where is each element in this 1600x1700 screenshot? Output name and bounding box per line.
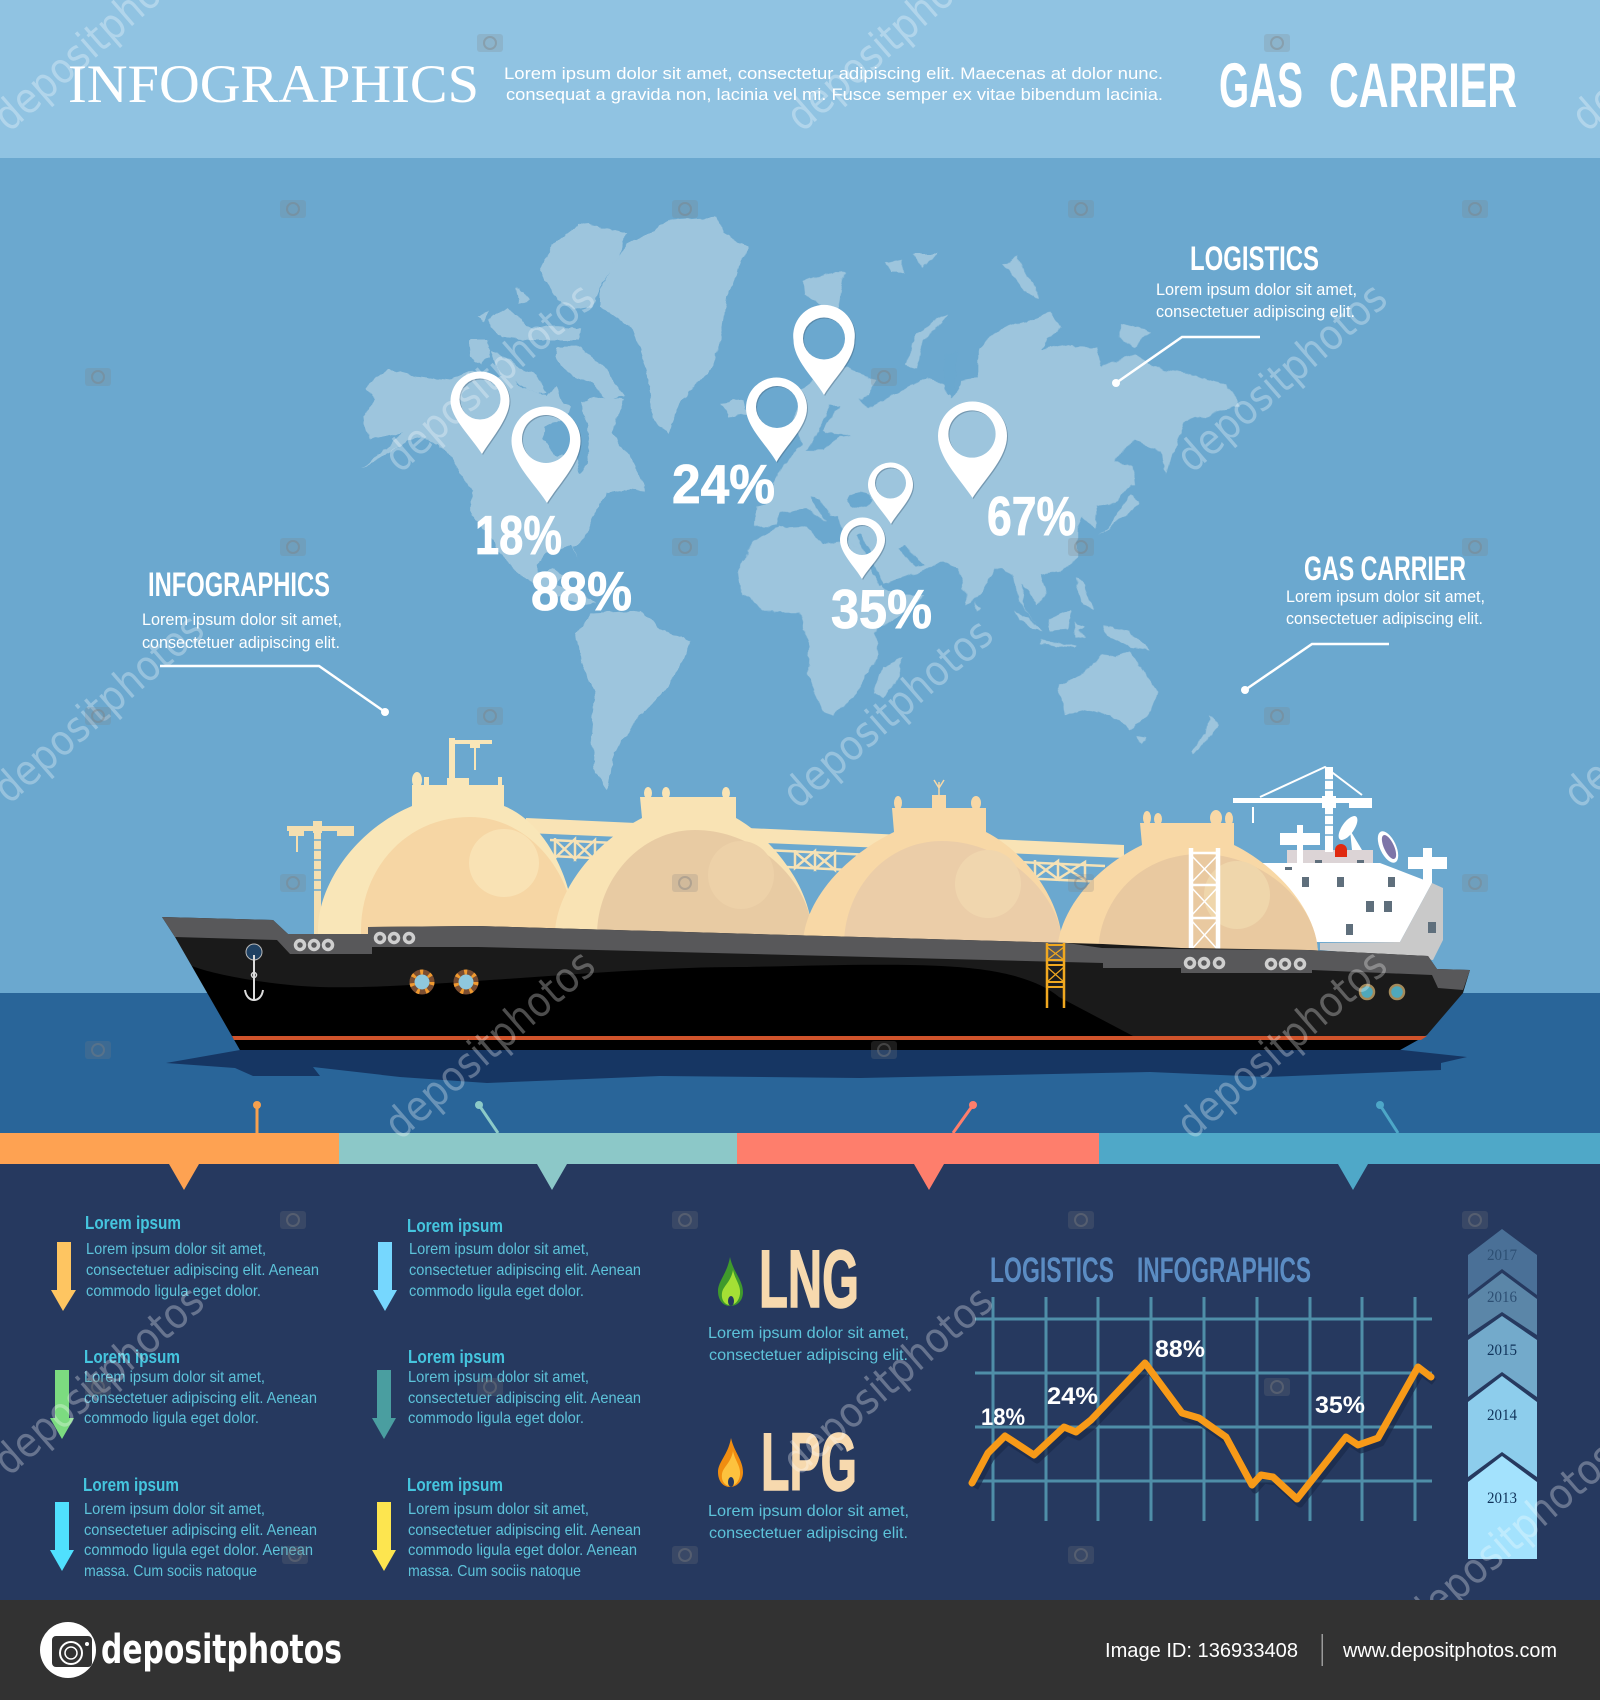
colored ribbon with pointers	[0, 1133, 1600, 1190]
list item 5	[50, 1474, 317, 1580]
marker red	[953, 1101, 977, 1133]
tank 1	[318, 785, 574, 960]
list item 1	[51, 1212, 319, 1311]
tank 2	[555, 787, 812, 960]
callout: gas carrier: GAS CARRIER	[1304, 550, 1466, 588]
callout: infographics: consectetuer adipiscing elit.	[142, 634, 340, 652]
header description	[504, 65, 1163, 104]
LNG label: LNG	[759, 1234, 859, 1325]
year 2014	[1468, 1376, 1537, 1477]
chart value 35: 35%	[1315, 1392, 1365, 1419]
ribbon orange	[0, 1133, 339, 1190]
88 percent: 88%	[531, 560, 632, 622]
percentage labels on map	[475, 453, 1076, 640]
list item 4: consectetuer adipiscing elit. Aenean	[408, 1390, 641, 1407]
year 2015: 2015	[1487, 1342, 1517, 1359]
list item 2: consectetuer adipiscing elit. Aenean	[409, 1262, 641, 1279]
white ladder	[1191, 848, 1218, 956]
footer	[0, 1600, 1600, 1700]
tank crane	[412, 738, 502, 788]
watermark: depositphotos	[1166, 940, 1396, 1149]
footer logo	[40, 1622, 342, 1678]
pin 2	[512, 406, 580, 503]
header brand title	[1219, 51, 1517, 121]
list item 3: Lorem ipsum dolor sit amet,	[84, 1369, 265, 1386]
list item 4: Lorem ipsum	[408, 1346, 505, 1367]
deck band	[162, 917, 1470, 990]
chart heading: INFOGRAPHICS	[1137, 1251, 1311, 1290]
line chart	[972, 1297, 1434, 1521]
map: inland seas	[806, 352, 958, 586]
radar dishes	[1335, 813, 1402, 866]
callout: logistics: LOGISTICS	[1190, 240, 1319, 278]
red waterline	[232, 1036, 1427, 1040]
67 percent: 67%	[987, 485, 1076, 547]
catwalk beam and trusses	[526, 818, 1124, 882]
red beacon	[1335, 844, 1347, 857]
tank 4	[1057, 810, 1318, 970]
list item 2: Lorem ipsum	[407, 1215, 503, 1236]
orange ladder	[1047, 943, 1064, 1008]
18 percent: 18%	[475, 504, 562, 566]
LNG block	[708, 1234, 909, 1364]
bridge crosses	[1280, 825, 1447, 883]
LPG text: consectetuer adipiscing elit.	[709, 1525, 908, 1542]
sky background	[0, 158, 1600, 993]
year 2013	[1468, 1456, 1537, 1559]
superstructure	[1233, 767, 1447, 960]
ribbon blue	[1099, 1133, 1600, 1190]
list item 3	[50, 1346, 317, 1439]
icon: anchor	[245, 944, 263, 1000]
sea	[0, 993, 1600, 1133]
marker teal	[475, 1101, 498, 1133]
ribbon teal	[339, 1133, 737, 1190]
LNG text: Lorem ipsum dolor sit amet,	[708, 1325, 909, 1342]
callout: infographics: INFOGRAPHICS	[148, 566, 330, 604]
map: eurasia africa and australia	[737, 254, 1240, 753]
chart heading: LOGISTICS	[990, 1251, 1114, 1290]
watermark camera icons	[85, 34, 1488, 1564]
list item 2: commodo ligula eget dolor.	[409, 1283, 584, 1300]
list item 4: commodo ligula eget dolor.	[408, 1410, 584, 1427]
location pins	[450, 305, 1007, 579]
map: north america and greenland	[360, 217, 747, 605]
chart value 88: 88%	[1155, 1336, 1205, 1363]
LNG text	[708, 1325, 909, 1364]
header brand title: GAS	[1219, 51, 1303, 121]
watermark: depositphotos	[772, 1276, 1002, 1485]
year chevron stack	[1468, 1229, 1537, 1559]
tank 3	[803, 780, 1062, 960]
pin 4	[793, 305, 855, 395]
callout: logistics: consectetuer adipiscing elit.	[1156, 303, 1355, 321]
list item 6: Lorem ipsum	[407, 1474, 503, 1495]
LPG block	[708, 1417, 909, 1542]
orange data line	[972, 1363, 1431, 1499]
gas carrier ship	[162, 738, 1470, 1050]
marker orange	[253, 1101, 261, 1133]
callout: gas carrier: Lorem ipsum dolor sit amet,	[1286, 588, 1485, 606]
ribbon red	[737, 1133, 1099, 1190]
pin 7	[840, 518, 885, 579]
list item 5: consectetuer adipiscing elit. Aenean	[84, 1522, 317, 1539]
pin 6	[868, 462, 913, 524]
list item 1: commodo ligula eget dolor.	[86, 1283, 261, 1300]
header title: INFOGRAPHICS	[68, 54, 479, 114]
line shadow	[975, 1368, 1434, 1504]
icon: orange flame	[718, 1438, 743, 1487]
ship shadow on water	[166, 1050, 1467, 1083]
bow hull windows	[412, 972, 476, 992]
callout: infographics	[142, 566, 389, 716]
marker blue	[1376, 1101, 1398, 1133]
footer logo: depositphotos	[101, 1627, 342, 1673]
chart value 24: 24%	[1047, 1383, 1098, 1410]
list item 3: commodo ligula eget dolor.	[84, 1410, 259, 1427]
24 percent: 24%	[672, 453, 775, 515]
year 2013: 2013	[1487, 1490, 1517, 1507]
callout: gas carrier: consectetuer adipiscing elit.	[1286, 610, 1483, 628]
watermark: depositphotos	[374, 940, 604, 1149]
image id: Image ID: 136933408	[1105, 1640, 1298, 1662]
pin 5	[938, 402, 1007, 498]
year 2017: 2017	[1487, 1247, 1517, 1264]
map: south america	[577, 610, 690, 789]
watermark: depositphotos	[772, 609, 1002, 818]
header band	[0, 0, 1600, 158]
list item 5: massa. Cum sociis natoque	[84, 1563, 257, 1580]
year 2017	[1468, 1229, 1537, 1295]
year 2014: 2014	[1487, 1407, 1517, 1424]
list item 4: Lorem ipsum dolor sit amet,	[408, 1369, 589, 1386]
year 2016	[1468, 1273, 1537, 1335]
main crane	[1233, 767, 1372, 852]
list item 6: consectetuer adipiscing elit. Aenean	[408, 1522, 641, 1539]
hull	[162, 917, 1470, 1050]
year 2015	[1468, 1316, 1537, 1397]
list item 4	[372, 1346, 641, 1439]
callout: infographics: Lorem ipsum dolor sit amet,	[142, 611, 342, 629]
pin 1	[450, 372, 510, 454]
windows	[1285, 860, 1436, 935]
list item 1: consectetuer adipiscing elit. Aenean	[86, 1262, 319, 1279]
list item 6	[372, 1474, 641, 1580]
list item 6: Lorem ipsum dolor sit amet,	[408, 1501, 589, 1518]
icon: green flame	[718, 1257, 743, 1306]
list item 1: Lorem ipsum dolor sit amet,	[86, 1241, 266, 1258]
chart value 18: 18%	[981, 1404, 1025, 1431]
list item 6: massa. Cum sociis natoque	[408, 1563, 581, 1580]
list item 5: commodo ligula eget dolor. Aenean	[84, 1542, 313, 1559]
chart heading	[990, 1251, 1311, 1290]
pin 3	[746, 377, 807, 462]
navy lower panel	[0, 1164, 1600, 1600]
stern hull windows	[1360, 985, 1404, 999]
list item 2: Lorem ipsum dolor sit amet,	[409, 1241, 589, 1258]
LPG label: LPG	[761, 1417, 857, 1508]
website: www.depositphotos.com	[1342, 1640, 1557, 1662]
bow crane	[287, 821, 354, 934]
year 2016: 2016	[1487, 1289, 1517, 1306]
35 percent: 35%	[831, 578, 932, 640]
watermark: depositphotos	[374, 273, 604, 482]
LPG text: Lorem ipsum dolor sit amet,	[708, 1503, 909, 1520]
deck portholes	[296, 934, 1304, 968]
callout: logistics	[1112, 240, 1357, 387]
world map	[360, 217, 1240, 789]
list item 5: Lorem ipsum	[83, 1474, 179, 1495]
sea markers	[253, 1101, 1398, 1133]
list item 6: commodo ligula eget dolor. Aenean	[408, 1542, 637, 1559]
callout: logistics: Lorem ipsum dolor sit amet,	[1156, 281, 1357, 299]
list item 1: Lorem ipsum	[85, 1212, 181, 1233]
list item 3: consectetuer adipiscing elit. Aenean	[84, 1390, 317, 1407]
header description: Lorem ipsum dolor sit amet, consectetur adipiscing elit. Maecenas at dolor nunc.	[504, 65, 1163, 83]
hull black lower section	[192, 965, 1425, 1050]
callout: gas carrier	[1241, 550, 1485, 694]
LNG text: consectetuer adipiscing elit.	[709, 1347, 908, 1364]
list item 5: Lorem ipsum dolor sit amet,	[84, 1501, 265, 1518]
watermark: depositphotos	[1166, 273, 1396, 482]
header description: consequat a gravida non, lacinia vel mi. Fusce semper ex vitae bibendum lacinia.	[506, 86, 1163, 104]
list item 3: Lorem ipsum	[84, 1346, 180, 1367]
list item 2	[373, 1215, 641, 1311]
LPG text	[708, 1503, 909, 1542]
